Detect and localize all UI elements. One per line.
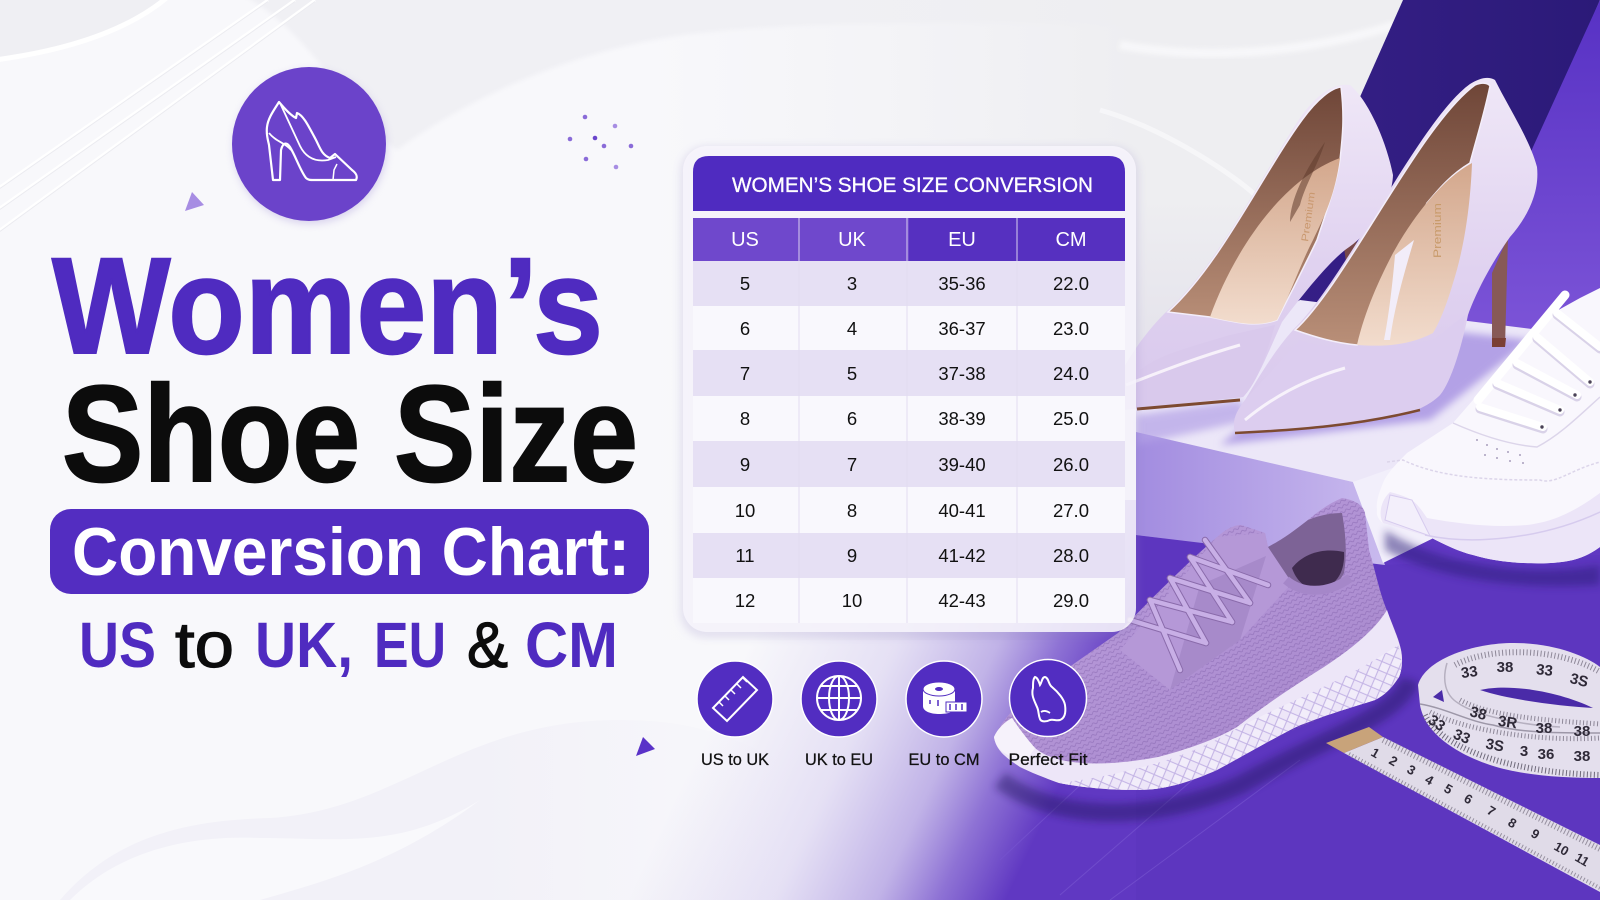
table rows: 5 bbox=[847, 363, 857, 384]
icon: globe, UK to EU bbox=[801, 661, 877, 769]
measuring tape coil: 3R bbox=[1497, 713, 1518, 732]
table rows: 9 bbox=[847, 545, 857, 566]
purple floor fade bbox=[0, 500, 1600, 900]
left pump bbox=[1107, 85, 1393, 410]
straight measuring tape: 3 bbox=[1404, 762, 1418, 778]
straight measuring tape: 8 bbox=[1506, 815, 1519, 831]
table title bar: WOMEN’S SHOE SIZE CONVERSION bbox=[732, 174, 1093, 197]
table rows: 3 bbox=[847, 273, 857, 294]
table rows: 35-36 bbox=[938, 273, 986, 294]
right pump: Premium bbox=[1432, 203, 1444, 258]
right pump: Premium bbox=[1300, 191, 1318, 242]
table rows: 37-38 bbox=[938, 363, 986, 384]
straight measuring tape bbox=[1326, 727, 1600, 892]
straight measuring tape: 7 bbox=[1484, 803, 1498, 819]
icon: tape measure, EU to CM bbox=[906, 661, 982, 769]
measuring tape coil: 33 bbox=[1425, 712, 1448, 735]
decorative triangle: lower bbox=[636, 737, 655, 756]
table rows: 27.0 bbox=[1053, 500, 1089, 521]
measuring tape coil: 3 bbox=[1520, 743, 1528, 760]
table rows: 38-39 bbox=[938, 408, 986, 429]
floor right bbox=[1000, 535, 1600, 900]
measuring tape coil: 38 bbox=[1468, 703, 1488, 724]
decorative dots bbox=[568, 115, 633, 169]
panel: conversion table bbox=[680, 146, 1139, 638]
subtitle: EU bbox=[374, 609, 446, 681]
table rows: 41-42 bbox=[938, 545, 986, 566]
table rows: 36-37 bbox=[938, 318, 986, 339]
right pump bbox=[1234, 78, 1537, 433]
straight measuring tape: 6 bbox=[1462, 791, 1475, 807]
subtitle: CM bbox=[525, 609, 618, 681]
table rows: 24.0 bbox=[1053, 363, 1089, 384]
table rows: 29.0 bbox=[1053, 590, 1089, 611]
table rows: 10 bbox=[735, 500, 755, 521]
measuring tape coil bbox=[1418, 643, 1600, 778]
icon: globe, UK to EU: UK to EU bbox=[805, 750, 873, 769]
column headers: US bbox=[731, 229, 759, 251]
subtitle: & bbox=[467, 609, 508, 681]
measuring tape coil: 38 bbox=[1574, 748, 1590, 765]
table rows bbox=[693, 261, 1125, 623]
table rows: 28.0 bbox=[1053, 545, 1089, 566]
table rows: 12 bbox=[735, 590, 755, 611]
measuring tape coil: 33 bbox=[1451, 726, 1473, 748]
dark purple diagonal band bbox=[1230, 0, 1600, 390]
column headers: EU bbox=[948, 229, 976, 251]
table rows: 7 bbox=[847, 454, 857, 475]
pedestal bbox=[1136, 300, 1600, 565]
title: Women's: Women’s bbox=[52, 230, 603, 383]
table rows: 5 bbox=[740, 273, 750, 294]
table rows: 8 bbox=[740, 408, 750, 429]
straight measuring tape: 1 bbox=[1368, 745, 1382, 761]
column headers: UK bbox=[838, 229, 867, 251]
table rows: 26.0 bbox=[1053, 454, 1089, 475]
table rows: 7 bbox=[740, 363, 750, 384]
table rows: 23.0 bbox=[1053, 318, 1089, 339]
column headers: CM bbox=[1055, 229, 1087, 251]
icon: ruler, US to UK bbox=[697, 661, 773, 769]
title pill: Conversion Chart: Conversion Chart: bbox=[72, 514, 630, 590]
title: Shoe Size: Shoe Size bbox=[62, 358, 638, 511]
table rows: 9 bbox=[740, 454, 750, 475]
measuring tape coil: 33 bbox=[1460, 663, 1479, 682]
straight measuring tape: 5 bbox=[1442, 781, 1455, 797]
icon: ruler, US to UK: US to UK bbox=[701, 750, 770, 769]
table title bar bbox=[693, 156, 1125, 211]
measuring tape coil: 3S bbox=[1484, 736, 1505, 756]
icon: foot, Perfect Fit: Perfect Fit bbox=[1008, 750, 1088, 769]
straight measuring tape: 10 bbox=[1552, 839, 1572, 859]
purple knit sneaker bbox=[994, 498, 1410, 812]
straight measuring tape: 2 bbox=[1386, 753, 1400, 769]
subtitle: US bbox=[79, 609, 156, 681]
measuring tape coil: 38 bbox=[1497, 659, 1513, 676]
table rows: 6 bbox=[847, 408, 857, 429]
decorative triangle: upper bbox=[185, 192, 204, 211]
icon: foot, Perfect Fit bbox=[1008, 660, 1088, 769]
table rows: 42-43 bbox=[938, 590, 986, 611]
table rows: 10 bbox=[842, 590, 862, 611]
white sneaker bbox=[1377, 288, 1600, 586]
icon: tape measure, EU to CM: EU to CM bbox=[908, 750, 980, 769]
measuring tape coil: 33 bbox=[1535, 661, 1554, 680]
table rows: 8 bbox=[847, 500, 857, 521]
table rows: 40-41 bbox=[938, 500, 986, 521]
straight measuring tape: 9 bbox=[1528, 826, 1542, 842]
measuring tape coil: 38 bbox=[1536, 720, 1552, 737]
right purple panel bbox=[1450, 0, 1600, 345]
table rows: 22.0 bbox=[1053, 273, 1089, 294]
column headers bbox=[693, 218, 1125, 261]
table rows: 11 bbox=[735, 545, 755, 566]
table rows: 25.0 bbox=[1053, 408, 1089, 429]
wall behind shoes bbox=[1136, 0, 1436, 440]
measuring tape coil: 36 bbox=[1538, 746, 1554, 763]
subtitle: UK, bbox=[255, 609, 353, 681]
icon: high heel badge bbox=[232, 67, 387, 224]
straight measuring tape: 11 bbox=[1572, 850, 1592, 869]
subtitle: to bbox=[175, 609, 234, 681]
table rows: 4 bbox=[847, 318, 857, 339]
table rows: 6 bbox=[740, 318, 750, 339]
measuring tape coil: 3S bbox=[1568, 670, 1590, 691]
straight measuring tape: 4 bbox=[1422, 772, 1437, 789]
measuring tape coil: 38 bbox=[1574, 723, 1590, 740]
table rows: 39-40 bbox=[938, 454, 986, 475]
subtitle bbox=[79, 609, 618, 681]
